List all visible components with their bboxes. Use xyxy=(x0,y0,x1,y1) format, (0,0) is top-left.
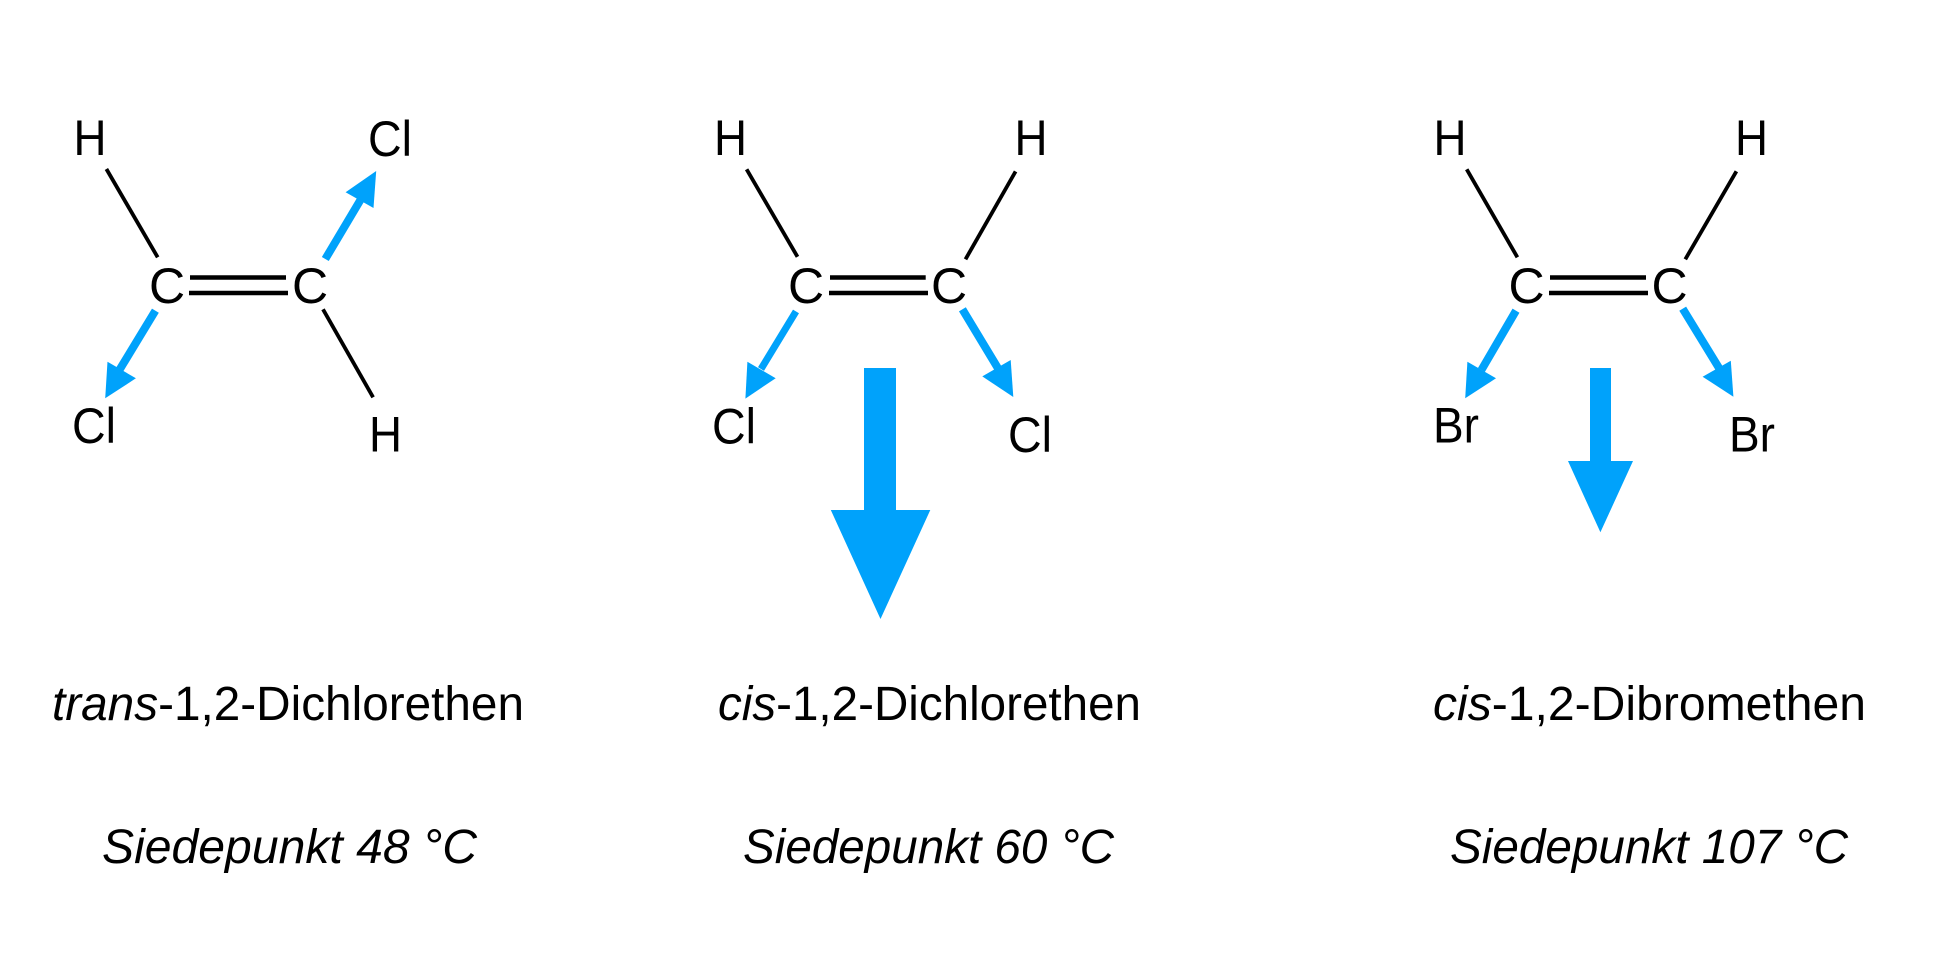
panel: cis-1,2-Dibromethen xyxy=(1433,110,1775,532)
atom label: C left: C xyxy=(1508,258,1545,314)
bond: H to C xyxy=(106,169,158,257)
large resulting dipole arrow xyxy=(831,368,930,619)
atom label: C right: C xyxy=(292,258,328,314)
atom label: C right: C xyxy=(931,258,967,314)
atom label: C left: C xyxy=(788,258,824,314)
double bond xyxy=(1549,278,1648,293)
dipole arrow: towards Br left xyxy=(1465,311,1516,398)
atom label: Br left: Br xyxy=(1433,398,1479,454)
atom label: Cl left: Cl xyxy=(712,399,756,455)
bond: H to C right xyxy=(966,171,1016,259)
atom label: Cl bottom left: Cl xyxy=(72,398,116,454)
atom label: Cl top right: Cl xyxy=(368,111,412,167)
compound name: cis-1,2-Dichlorethen: cis-1,2-Dichlorethen xyxy=(718,678,1141,731)
boiling point: 48 °C: Siedepunkt 48 °C xyxy=(102,821,477,874)
compound name: cis-1,2-Dibromethen: cis-1,2-Dibromethen xyxy=(1433,678,1866,731)
atom label: Br right: Br xyxy=(1729,407,1775,463)
dipole arrow: towards Cl right xyxy=(962,309,1013,397)
atom label: H top right: H xyxy=(1014,110,1048,166)
dipole arrow: towards Cl left xyxy=(745,311,796,399)
atom label: H top left: H xyxy=(1434,110,1466,166)
panel: cis-1,2-Dichlorethen xyxy=(712,110,1052,619)
bond: C to H bottom right xyxy=(323,309,373,397)
atom label: H top left: H xyxy=(714,110,747,166)
double bond xyxy=(189,278,288,293)
atom label: H top right: H xyxy=(1735,110,1768,166)
compound name: trans-1,2-Dichlorethen: trans-1,2-Dichlorethen xyxy=(52,678,524,731)
atom label: H top left: H xyxy=(74,110,106,166)
dipole arrow: towards Br right xyxy=(1683,309,1733,397)
dipole arrow: towards Cl top right xyxy=(325,171,376,259)
atom label: H bottom right: H xyxy=(369,407,402,463)
bond: H to C right xyxy=(1685,171,1736,259)
atom label: Cl right: Cl xyxy=(1008,407,1052,463)
bond: H to C left xyxy=(1467,169,1517,257)
panel: trans-1,2-Dichlorethen xyxy=(72,110,412,463)
double bond xyxy=(829,278,928,293)
atom label: C left: C xyxy=(149,258,185,314)
resulting dipole arrow xyxy=(1568,368,1633,532)
boiling point: 60 °C: Siedepunkt 60 °C xyxy=(743,821,1114,874)
atom label: C right: C xyxy=(1651,258,1688,314)
boiling point: 107 °C: Siedepunkt 107 °C xyxy=(1450,821,1848,874)
bond: H to C left xyxy=(747,169,798,257)
dipole arrow: towards Cl bottom left xyxy=(105,311,155,398)
